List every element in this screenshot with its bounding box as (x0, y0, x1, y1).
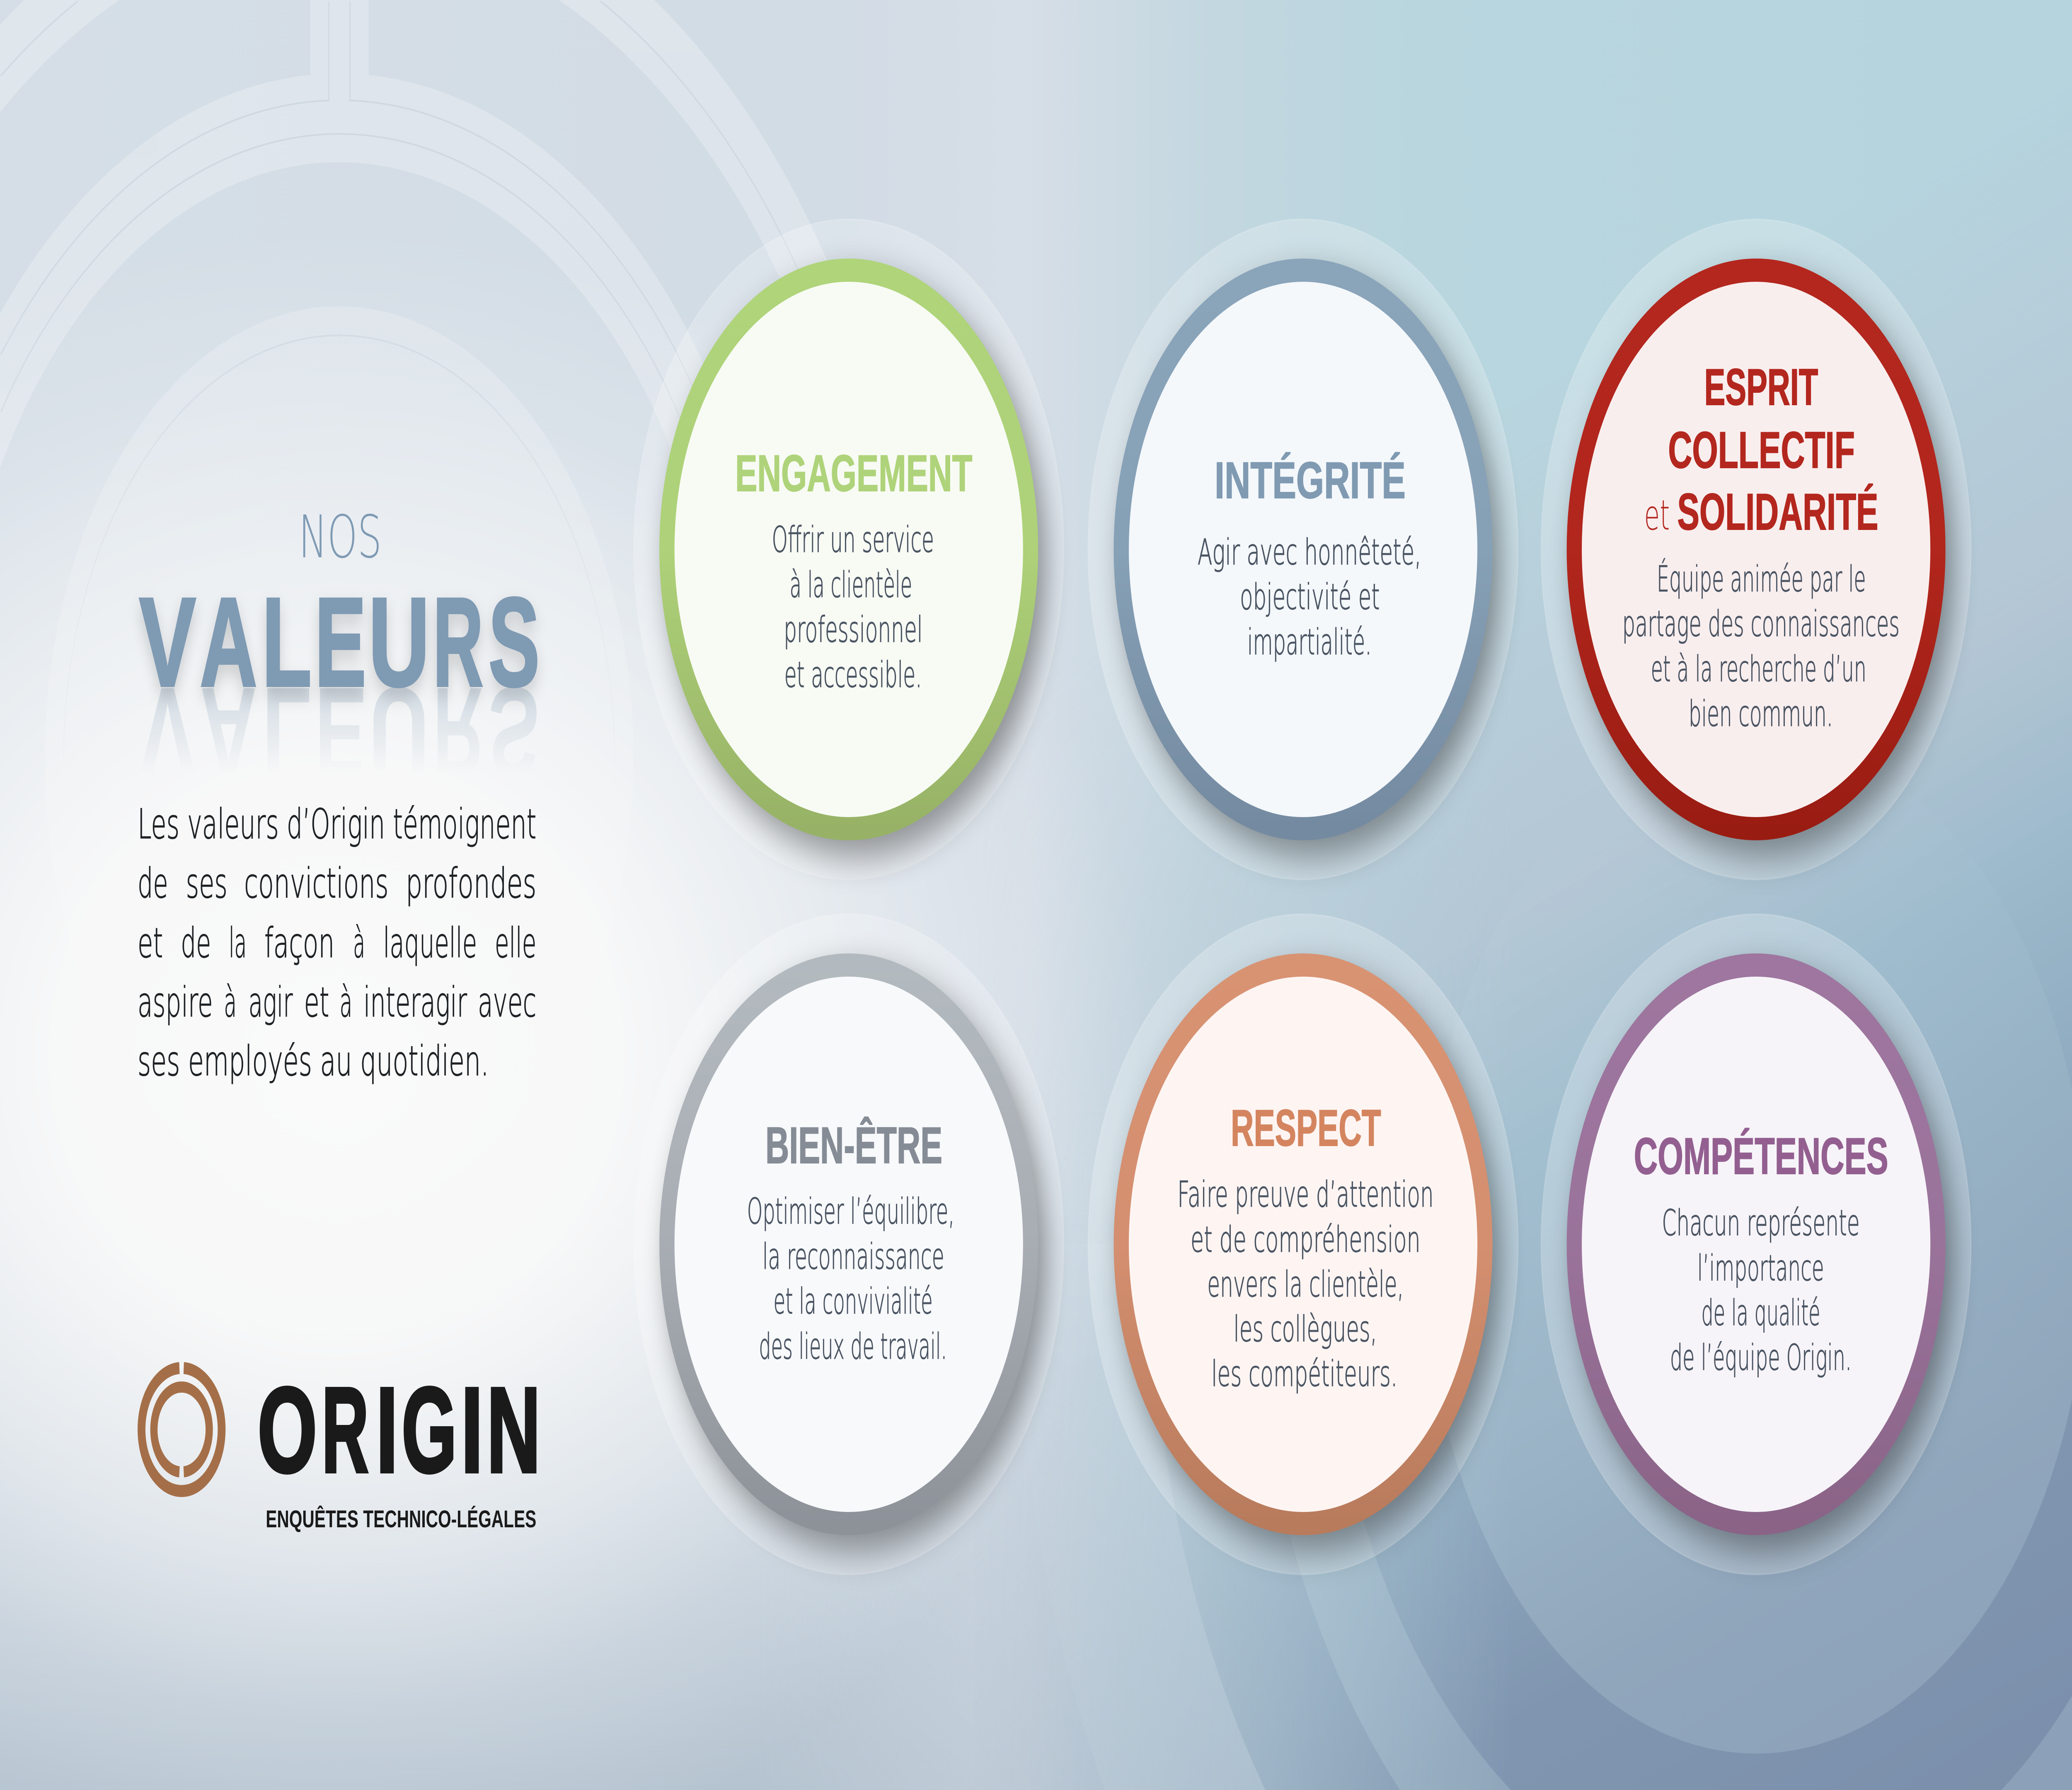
heading: VALEURS: R (433, 571, 483, 713)
ring and disc (667, 270, 1031, 829)
heading reflection: VALEURS (139, 661, 540, 803)
heading: BIEN-ÊTRE (765, 1117, 942, 1174)
logo wordmark: G (402, 1363, 457, 1498)
intro text block: elle (495, 919, 536, 967)
ring and disc (1574, 270, 1938, 829)
heading reflection: VALEURS: U (368, 661, 429, 803)
heading (1644, 359, 1878, 541)
intro text block: ses employés au quotidien. (138, 1037, 489, 1085)
ring and disc (1121, 965, 1485, 1524)
heading: VALEURS: L (262, 571, 312, 713)
heading: INTÉGRITÉ (1215, 452, 1406, 509)
heading: NOS: NOS (299, 503, 382, 571)
logo wordmark: O (258, 1363, 317, 1498)
intro text block: la (229, 919, 247, 967)
description: Agir avec honnêteté, (1198, 532, 1421, 573)
description: de l’équipe Origin. (1670, 1338, 1852, 1379)
icon: Origin rings (141, 1368, 222, 1491)
description: Offrir un service (772, 520, 934, 561)
intro text block: à (340, 978, 352, 1026)
logo: Origin (141, 1363, 540, 1533)
logo wordmark: R (322, 1363, 368, 1498)
ring and disc (1121, 270, 1485, 829)
intro text block: profondes (406, 859, 536, 907)
intro text block: de (138, 859, 168, 907)
heading: VALEURS: U (368, 571, 429, 713)
intro text block: et (304, 978, 329, 1026)
logo wordmark: I (461, 1363, 483, 1498)
description: les compétiteurs. (1211, 1354, 1397, 1395)
description (747, 1191, 954, 1367)
heading: ESPRIT (1704, 359, 1818, 416)
intro text block: à (353, 919, 365, 967)
heading reflection: VALEURS: E (315, 661, 366, 803)
description (772, 520, 934, 696)
description: Optimiser l’équilibre, (747, 1191, 954, 1232)
heading: et (1644, 491, 1670, 539)
intro text block: convictions (244, 859, 388, 907)
panel: Compétences (1541, 914, 1971, 1575)
intro text block: aspire (138, 978, 213, 1026)
heading reflection: VALEURS: L (262, 661, 312, 803)
intro text block: interagir (363, 978, 467, 1026)
heading reflection: VALEURS: V (139, 661, 196, 803)
description (1177, 1174, 1434, 1395)
description: professionnel (784, 610, 923, 651)
heading: COMPÉTENCES (1634, 1128, 1888, 1185)
description: impartialité. (1247, 622, 1372, 663)
intro text block: laquelle (383, 919, 477, 967)
logo wordmark (258, 1363, 540, 1498)
description: et la convivialité (774, 1281, 933, 1322)
intro text block: avec (478, 978, 536, 1026)
description: Chacun représente (1662, 1203, 1860, 1244)
description: Faire preuve d’attention (1177, 1174, 1434, 1215)
heading: VALEURS: V (139, 571, 196, 713)
heading reflection: VALEURS: S (489, 661, 540, 803)
panel: Respect (1088, 914, 1518, 1575)
description: et de compréhension (1191, 1219, 1421, 1260)
panel: Esprit collectif et solidarité (1541, 219, 1971, 880)
description: objectivité et (1240, 577, 1380, 618)
panel: Bien-être (634, 914, 1064, 1575)
description: partage des connaissances (1622, 604, 1900, 645)
intro text block: façon (264, 919, 334, 967)
heading: SOLIDARITÉ (1677, 484, 1878, 541)
ring and disc (667, 965, 1031, 1524)
intro text block: et (138, 919, 163, 967)
description: et à la recherche d’un (1651, 649, 1866, 690)
description: l’importance (1697, 1248, 1824, 1289)
logo wordmark: I (376, 1363, 398, 1498)
description (1662, 1203, 1860, 1379)
heading reflection: VALEURS: A (200, 661, 257, 803)
heading reflection: VALEURS: R (433, 661, 483, 803)
description: les collègues, (1234, 1309, 1377, 1350)
description: à la clientèle (790, 565, 912, 606)
description: bien commun. (1689, 694, 1833, 735)
heading: VALEURS: A (200, 571, 257, 713)
panel: Engagement (634, 219, 1064, 880)
heading: VALEURS: S (489, 571, 540, 713)
ring and disc (1574, 965, 1938, 1524)
logo wordmark: N (487, 1363, 540, 1498)
intro text block: Les valeurs d’Origin témoignent (138, 800, 536, 848)
heading: COLLECTIF (1668, 422, 1855, 479)
intro text block: de (181, 919, 211, 967)
intro text block: agir (249, 978, 293, 1026)
description: des lieux de travail. (759, 1326, 947, 1367)
intro text block (138, 800, 536, 1085)
heading: RESPECT (1231, 1100, 1381, 1157)
heading: ENGAGEMENT (735, 445, 972, 502)
logo tagline: ENQUÊTES TECHNICO-LÉGALES (266, 1506, 536, 1533)
description: Équipe animée par le (1657, 558, 1866, 600)
description: de la qualité (1701, 1293, 1820, 1334)
description: envers la clientèle, (1207, 1264, 1404, 1305)
background rings: bottom right logo motif (1014, 735, 2072, 1790)
intro text block: à (224, 978, 237, 1026)
description (1198, 532, 1421, 663)
description (1622, 558, 1900, 735)
intro text block: ses (186, 859, 228, 907)
heading: VALEURS: E (315, 571, 366, 713)
background rings: top left logo motif (0, 0, 909, 1210)
description: et accessible. (784, 655, 922, 696)
heading: VALEURS (139, 571, 540, 713)
description: la reconnaissance (762, 1236, 944, 1277)
panel: Intégrité (1088, 219, 1518, 880)
